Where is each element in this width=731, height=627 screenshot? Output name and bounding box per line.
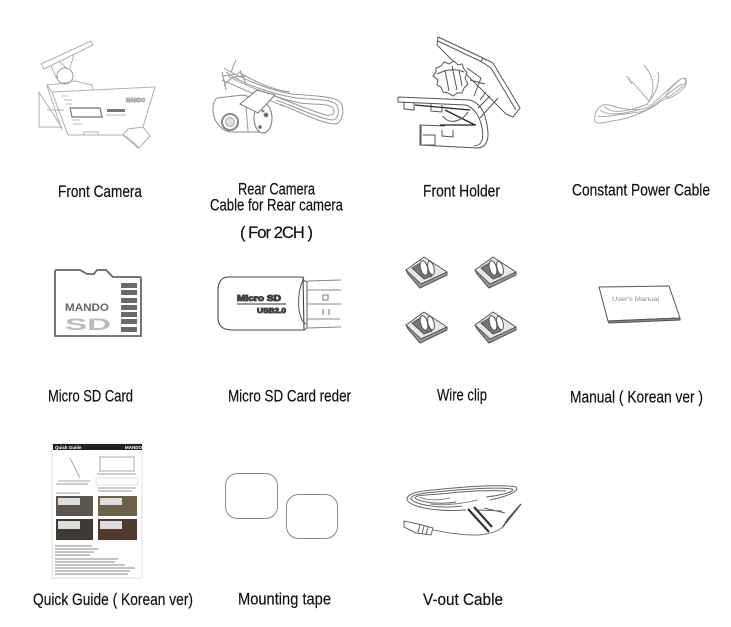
icon: front holder — [398, 37, 520, 148]
label: Rear Camera cable: ( For 2CH ) — [240, 224, 313, 242]
icon: micro SD card reader: USB2.0 — [257, 306, 286, 315]
label: Micro SD Card: Micro SD Card — [48, 388, 133, 406]
label: Front Camera: Front Camera — [58, 183, 143, 201]
icon: manual booklet: User's Manual — [612, 297, 659, 303]
label: Manual (Korean ver): Manual ( Korean ver ) — [570, 388, 703, 406]
icon: micro SD card: SD — [65, 315, 111, 334]
icon: front camera: MANDO — [126, 98, 145, 104]
icon: manual booklet — [599, 286, 680, 323]
icon: quick guide page — [52, 444, 142, 578]
label: V-out Cable: V-out Cable — [423, 591, 503, 609]
icon: micro SD card reader: Micro SD — [237, 294, 281, 303]
icon: micro SD card — [55, 270, 141, 336]
icon: quick guide page: MANDO — [125, 445, 142, 450]
label: Mounting tape: Mounting tape — [238, 590, 331, 608]
label: Wire clip: Wire clip — [437, 386, 487, 404]
icon: micro SD card reader — [218, 277, 341, 330]
icons: wire clips — [406, 257, 516, 343]
label: Micro SD Card reder: Micro SD Card reder — [228, 388, 351, 406]
icon: front camera — [39, 41, 155, 148]
label: Rear Camera cable: Cable for Rear camera — [210, 196, 344, 214]
icon: micro SD card: MANDO — [65, 302, 109, 314]
label: Front Holder: Front Holder — [423, 182, 500, 200]
icon: quick guide page: Quick Guide — [55, 445, 82, 450]
label: Quick Guide (Korean ver): Quick Guide ( Korean ver) — [33, 591, 193, 609]
icons: mounting tape — [226, 474, 338, 538]
label: Rear Camera cable: Rear Camera — [238, 180, 316, 198]
label: Rear Camera cable — [210, 180, 344, 242]
icon: V-out cable — [404, 486, 521, 535]
icon: rear camera with cable — [213, 60, 343, 133]
icon: constant power cable — [594, 65, 686, 123]
